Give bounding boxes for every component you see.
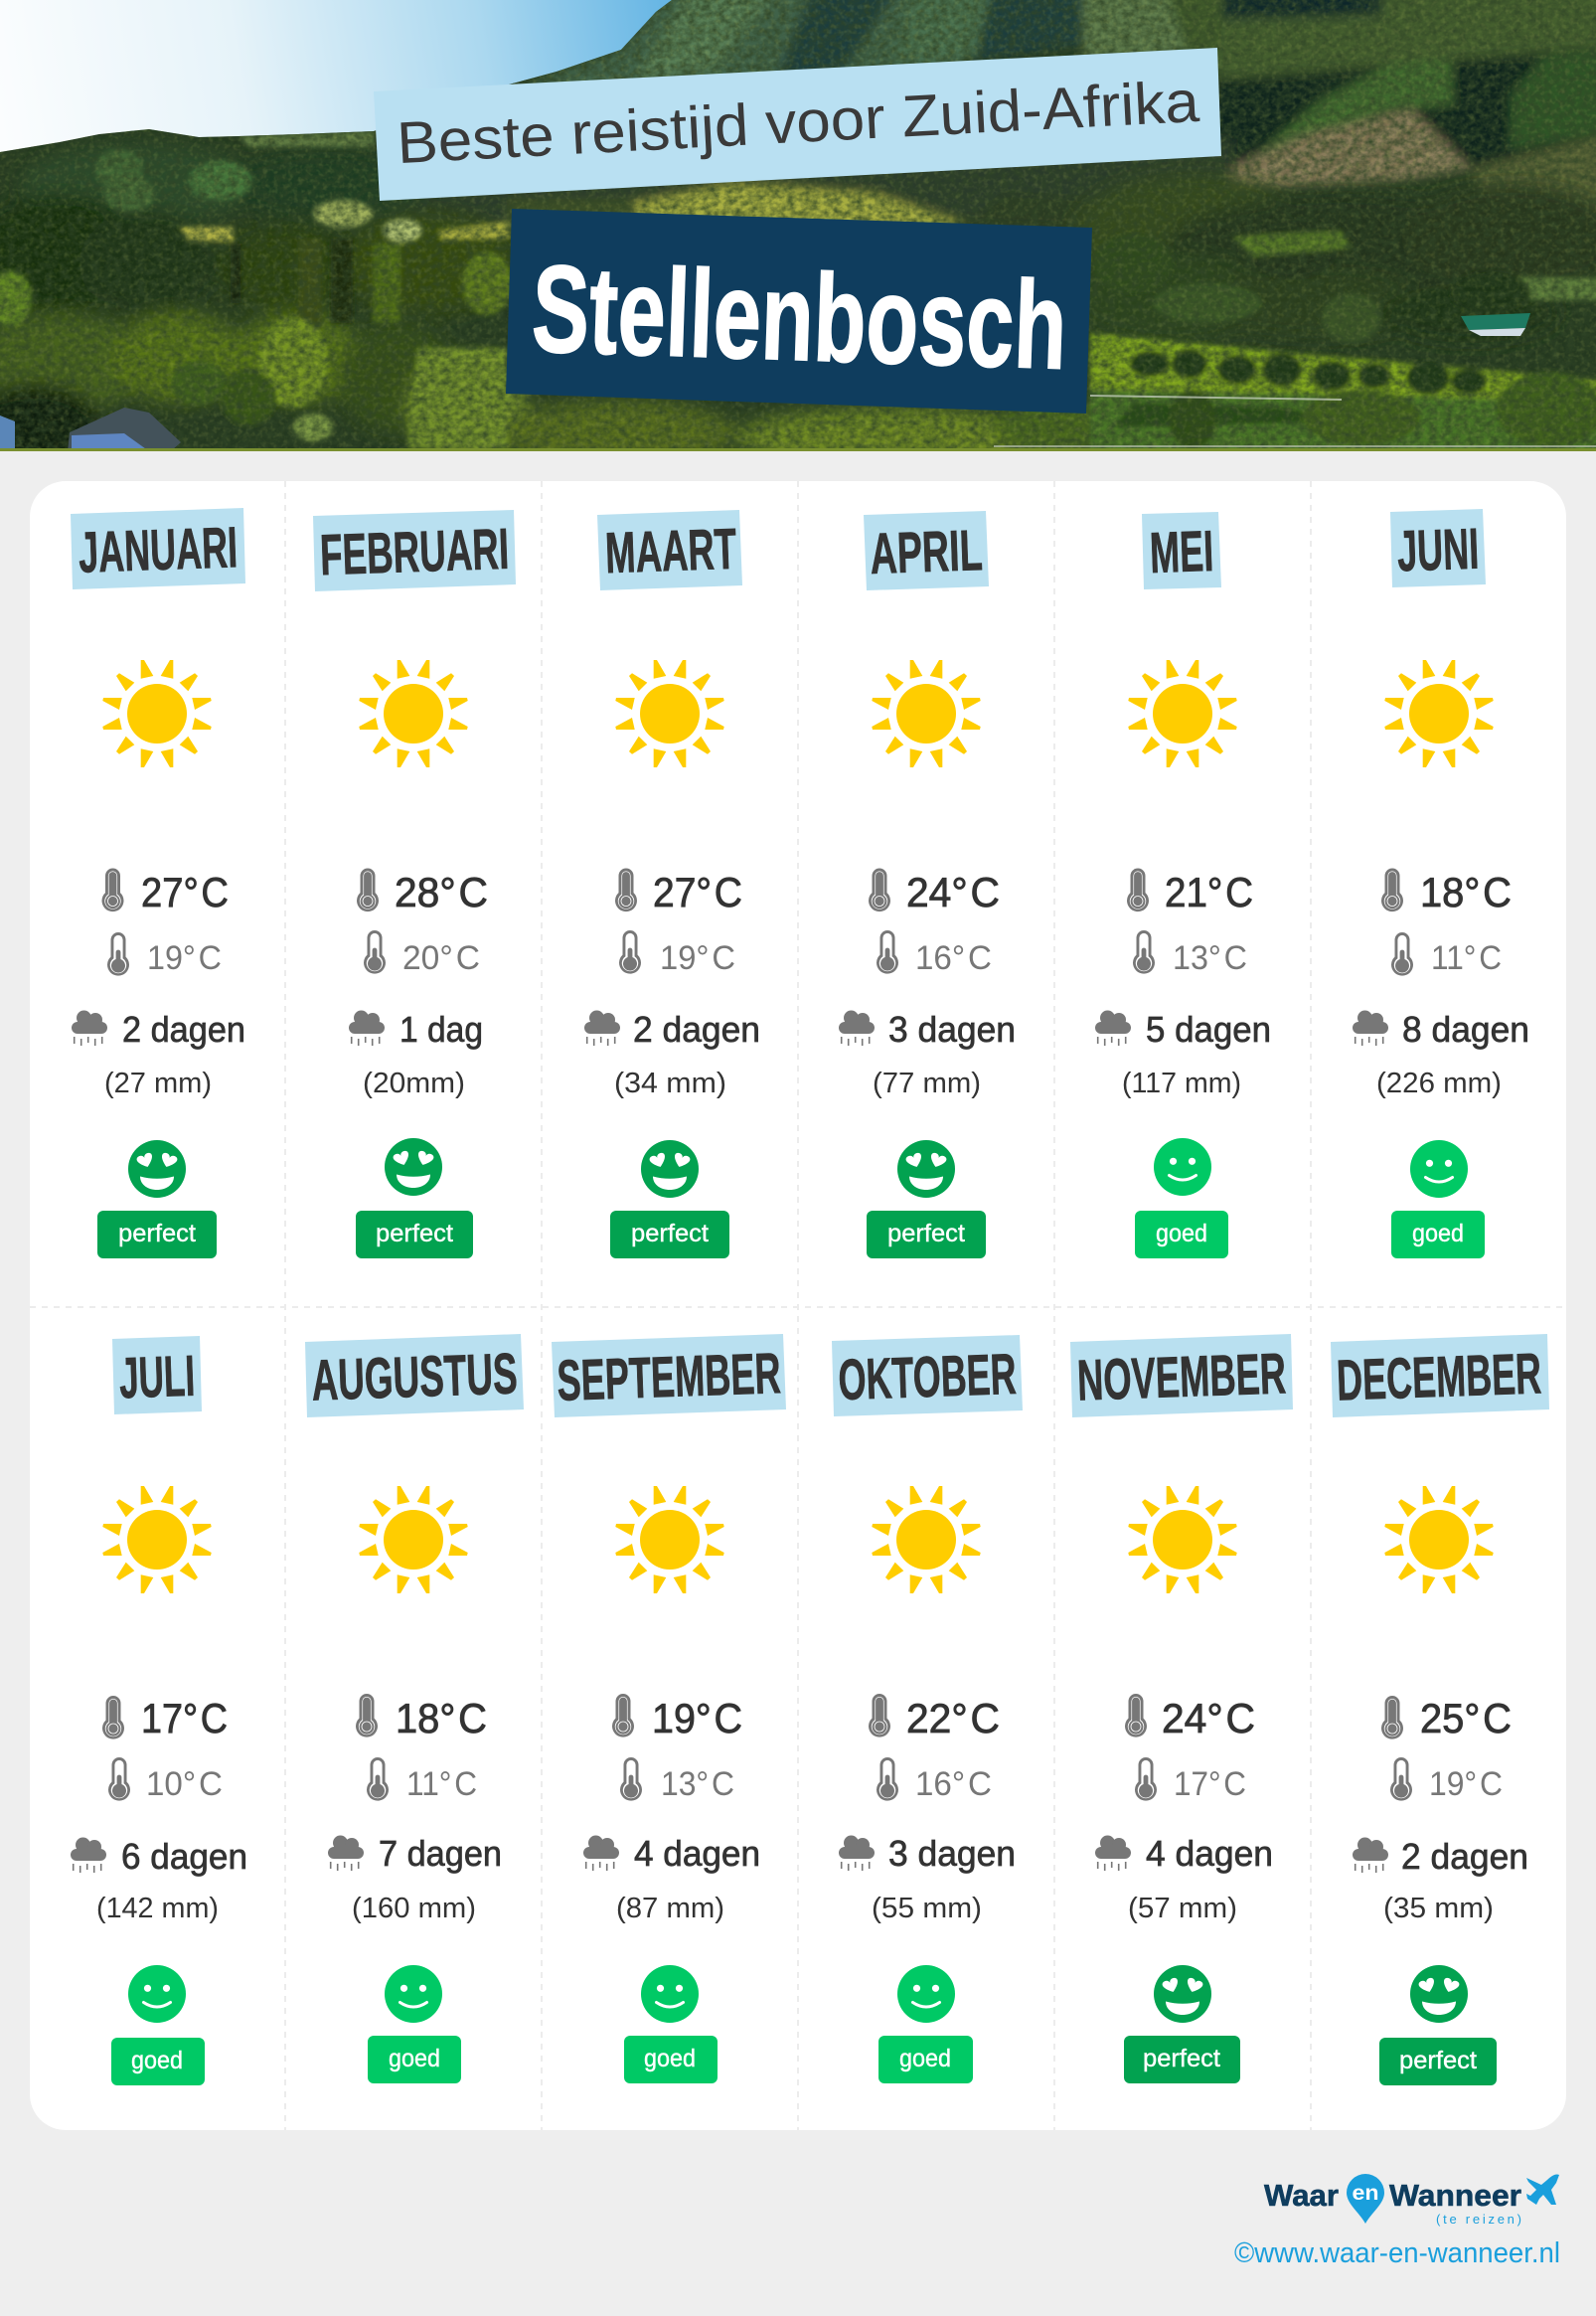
- month column: juli: [71, 1336, 247, 2085]
- logo: Waar en Wanneer: (te reizen): [1436, 2212, 1521, 2227]
- max temperature: 28°C: [395, 869, 488, 915]
- icon: thermometer low: [107, 932, 129, 976]
- month column: februari: [313, 510, 516, 1258]
- icon: rain cloud: [349, 1010, 385, 1046]
- month label: AUGUSTUS: [310, 1341, 519, 1413]
- month label: [313, 510, 516, 591]
- icon: sun: [872, 660, 981, 767]
- max temperature: 27°C: [141, 869, 229, 915]
- rating badge: goed: [1412, 1220, 1464, 1247]
- white calendar panel: [30, 481, 1566, 2130]
- rainfall: (226 mm): [1376, 1068, 1502, 1099]
- icon: thermometer low: [1390, 1757, 1412, 1801]
- logo: Waar en Wanneer: [1264, 2174, 1559, 2227]
- icon: thermometer low: [619, 930, 641, 974]
- logo: Waar en Wanneer: Waar: [1264, 2178, 1339, 2213]
- max temperature: 21°C: [1165, 869, 1253, 915]
- month label: SEPTEMBER: [556, 1341, 782, 1413]
- min temperature: 20°C: [402, 939, 480, 977]
- min temperature: 13°C: [1173, 939, 1247, 977]
- icon: rain cloud: [1353, 1837, 1388, 1873]
- rating badge: perfect: [1143, 2045, 1220, 2072]
- month label: [1070, 1334, 1293, 1417]
- month column: december: [1331, 1334, 1549, 2085]
- logo: Waar en Wanneer: Wanneer: [1389, 2178, 1521, 2213]
- icon: rain cloud: [72, 1010, 107, 1046]
- max temperature: 27°C: [653, 869, 742, 915]
- icon: thermometer high: [1125, 1694, 1147, 1737]
- icon: rain cloud: [1095, 1835, 1131, 1871]
- rainfall: (35 mm): [1383, 1893, 1494, 1924]
- min temperature: 13°C: [661, 1765, 734, 1803]
- month column: september: [552, 1334, 786, 2083]
- logo: Waar en Wanneer: en: [1352, 2182, 1379, 2205]
- icon: perfect face: [1410, 1965, 1468, 2023]
- max temperature: 19°C: [652, 1695, 742, 1741]
- icon: rain cloud: [1095, 1010, 1131, 1046]
- header photo: vineyard valley and mountain: [0, 0, 1596, 472]
- title banner: Beste reistijd voor Zuid-Afrika: [374, 48, 1221, 201]
- month column: oktober: [832, 1335, 1023, 2083]
- rain days: 4 dagen: [1146, 1833, 1273, 1874]
- max temperature: 18°C: [1420, 869, 1512, 915]
- month label: JUNI: [1396, 517, 1480, 583]
- icon: thermometer low: [1391, 932, 1413, 976]
- rating badge: perfect: [631, 1220, 709, 1247]
- icon: rain cloud: [328, 1835, 364, 1871]
- icon: sun: [102, 1486, 212, 1593]
- icon: thermometer high: [1381, 869, 1403, 911]
- rating badge: [1391, 1211, 1485, 1258]
- rating badge: perfect: [376, 1220, 453, 1247]
- icon: thermometer high: [615, 869, 637, 911]
- icon: thermometer high: [1381, 1696, 1403, 1739]
- icon: perfect face: [385, 1138, 442, 1196]
- icon: perfect face: [641, 1140, 699, 1198]
- icon: thermometer low: [108, 1757, 130, 1801]
- icon: sun: [1128, 1486, 1237, 1593]
- month label: NOVEMBER: [1076, 1341, 1287, 1413]
- rain days: 2 dagen: [122, 1009, 245, 1050]
- rain days: 4 dagen: [634, 1833, 760, 1874]
- icon: rain cloud: [839, 1010, 875, 1046]
- rain days: 5 dagen: [1146, 1009, 1271, 1050]
- icon: rain cloud: [1353, 1010, 1388, 1046]
- min temperature: 16°C: [915, 939, 992, 977]
- icon: good face: [128, 1965, 186, 2023]
- rain days: 2 dagen: [633, 1009, 760, 1050]
- icon: sun: [359, 1486, 468, 1593]
- city banner: Stellenbosch: Stellenbosch: [530, 240, 1069, 396]
- rain days: 2 dagen: [1401, 1836, 1528, 1877]
- icon: rain cloud: [584, 1010, 620, 1046]
- rating badge: goed: [389, 2045, 440, 2072]
- month label: JANUARI: [78, 515, 239, 585]
- month label: JULI: [118, 1344, 196, 1410]
- icon: sun: [615, 660, 724, 767]
- icon: sun: [1384, 660, 1494, 767]
- rain days: 7 dagen: [379, 1833, 502, 1874]
- icon: thermometer low: [620, 1757, 642, 1801]
- rating badge: [97, 1211, 217, 1258]
- month label: [305, 1334, 524, 1417]
- icon: sun: [615, 1486, 724, 1593]
- month label: FEBRUARI: [319, 517, 510, 587]
- website credit: ©www.waar-en-wanneer.nl: [1234, 2237, 1560, 2269]
- rain days: 3 dagen: [888, 1833, 1016, 1874]
- rating badge: [111, 2038, 205, 2085]
- month label: [112, 1336, 202, 1414]
- rain days: 1 dag: [399, 1009, 483, 1050]
- icon: sun: [1128, 660, 1237, 767]
- rating badge: goed: [899, 2045, 951, 2072]
- rating badge: [356, 1211, 473, 1258]
- rating badge: goed: [1156, 1220, 1207, 1247]
- icon: thermometer high: [356, 1694, 378, 1737]
- icon: thermometer low: [364, 930, 386, 974]
- month column: januari: [71, 508, 245, 1258]
- icon: thermometer high: [102, 1696, 124, 1739]
- icon: good face: [385, 1965, 442, 2023]
- rainfall: (55 mm): [872, 1893, 982, 1924]
- icon: good face: [641, 1965, 699, 2023]
- min temperature: 19°C: [660, 939, 735, 977]
- icon: perfect face: [897, 1140, 955, 1198]
- title banner: Beste reistijd voor Zuid-Afrika: Beste reistijd voor Zuid-Afrika: [396, 69, 1200, 176]
- month column: november: [1070, 1334, 1293, 2083]
- rating badge: [1379, 2038, 1497, 2085]
- rating badge: perfect: [1399, 2047, 1477, 2074]
- month column: juni: [1353, 509, 1529, 1258]
- icon: thermometer high: [1127, 869, 1149, 911]
- icon: perfect face: [1154, 1965, 1211, 2023]
- rating badge: perfect: [887, 1220, 965, 1247]
- rating badge: [878, 2036, 973, 2083]
- month label: MEI: [1149, 519, 1214, 585]
- icon: thermometer low: [877, 930, 898, 974]
- icon: thermometer low: [367, 1757, 389, 1801]
- month column: april: [839, 511, 1016, 1258]
- min temperature: 19°C: [1429, 1765, 1503, 1803]
- min temperature: 11°C: [406, 1765, 477, 1803]
- rainfall: (117 mm): [1122, 1068, 1241, 1099]
- icon: rain cloud: [839, 1835, 875, 1871]
- rainfall: (34 mm): [614, 1068, 726, 1099]
- month label: [71, 508, 245, 589]
- rating badge: [624, 2036, 718, 2083]
- rating badge: [368, 2036, 461, 2083]
- icon: thermometer low: [1133, 930, 1155, 974]
- month label: [1142, 512, 1221, 589]
- icon: sun: [102, 660, 212, 767]
- rainfall: (20mm): [363, 1068, 465, 1099]
- month label: OKTOBER: [837, 1342, 1018, 1412]
- min temperature: 19°C: [147, 939, 222, 977]
- max temperature: 25°C: [1420, 1695, 1512, 1741]
- month column: augustus: [305, 1334, 524, 2083]
- icon: rain cloud: [71, 1837, 106, 1873]
- min temperature: 17°C: [1174, 1765, 1246, 1803]
- rating badge: [867, 1211, 986, 1258]
- month label: [552, 1334, 786, 1417]
- rainfall: (27 mm): [104, 1068, 212, 1099]
- rainfall: (57 mm): [1128, 1893, 1237, 1924]
- rain days: 8 dagen: [1402, 1009, 1529, 1050]
- rating badge: perfect: [118, 1220, 196, 1247]
- month label: [597, 510, 742, 590]
- min temperature: 10°C: [146, 1765, 223, 1803]
- max temperature: 22°C: [906, 1695, 1000, 1741]
- icon: thermometer high: [357, 869, 379, 911]
- icon: thermometer low: [1135, 1757, 1157, 1801]
- icon: thermometer high: [869, 1694, 890, 1737]
- month column: maart: [584, 510, 760, 1258]
- min temperature: 16°C: [915, 1765, 992, 1803]
- rainfall: (160 mm): [352, 1893, 476, 1924]
- icon: thermometer high: [612, 1694, 634, 1737]
- noise keeps foliage from looking flat: [0, 0, 1596, 451]
- icon: thermometer high: [101, 869, 123, 911]
- rating badge: [1124, 2036, 1240, 2083]
- icon: good face: [1154, 1138, 1211, 1196]
- icon: thermometer high: [869, 869, 890, 911]
- rainfall: (142 mm): [96, 1893, 219, 1924]
- icon: sun: [1384, 1486, 1494, 1593]
- icon: good face: [897, 1965, 955, 2023]
- min temperature: 11°C: [1431, 939, 1502, 977]
- rainfall: (87 mm): [616, 1893, 724, 1924]
- month label: [864, 511, 989, 590]
- icon: sun: [359, 660, 468, 767]
- month label: [832, 1335, 1023, 1416]
- max temperature: 18°C: [396, 1695, 487, 1741]
- rainfall: (77 mm): [873, 1068, 981, 1099]
- max temperature: 24°C: [1162, 1695, 1255, 1741]
- icon: perfect face: [128, 1140, 186, 1198]
- max temperature: 17°C: [141, 1695, 228, 1741]
- icon: rain cloud: [583, 1835, 619, 1871]
- city banner: Stellenbosch: [506, 209, 1092, 414]
- month label: [1390, 509, 1486, 587]
- month label: APRIL: [869, 518, 984, 586]
- rating badge: [610, 1211, 729, 1258]
- month label: MAART: [604, 517, 737, 585]
- icon: sun: [872, 1486, 981, 1593]
- max temperature: 24°C: [906, 869, 1000, 915]
- icon: thermometer low: [877, 1757, 898, 1801]
- icon: good face: [1410, 1140, 1468, 1198]
- month column: mei: [1095, 512, 1271, 1258]
- rain days: 6 dagen: [121, 1836, 247, 1877]
- rain days: 3 dagen: [888, 1009, 1016, 1050]
- rating badge: goed: [131, 2047, 183, 2074]
- rating badge: goed: [644, 2045, 696, 2072]
- rating badge: [1135, 1211, 1228, 1258]
